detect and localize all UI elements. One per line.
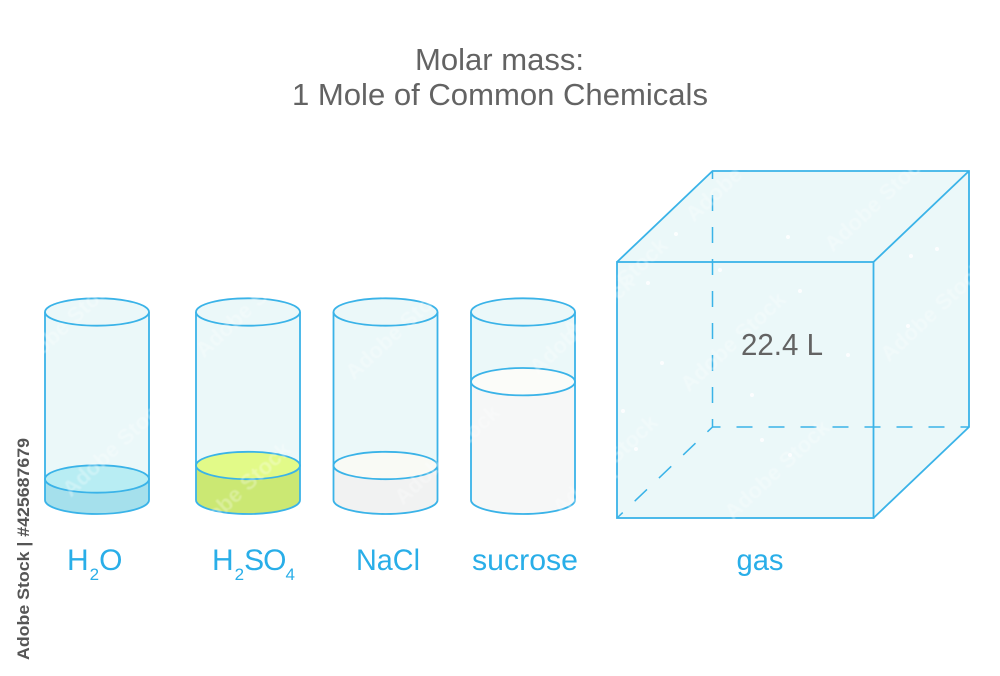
watermark pattern: Adobe Stock xyxy=(875,256,991,367)
watermark pattern: Adobe Stock xyxy=(389,399,505,510)
watermark pattern xyxy=(7,116,991,572)
label: H2SO4: SO xyxy=(244,544,286,577)
label: H2SO4: H xyxy=(212,544,234,577)
title: 1 Mole of Common Chemicals xyxy=(292,78,708,112)
title xyxy=(292,43,708,112)
watermark pattern: Adobe Stock xyxy=(57,391,173,502)
cylinder: H2O xyxy=(45,298,149,514)
watermark pattern: Adobe Stock xyxy=(675,286,791,397)
label: H2O: O xyxy=(99,544,122,577)
watermark pattern: Adobe Stock xyxy=(860,437,976,548)
watermark pattern: Adobe Stock xyxy=(507,461,623,572)
watermark pattern: Adobe Stock xyxy=(340,274,456,385)
watermark pattern: Adobe Stock xyxy=(680,116,796,227)
cube: gas volume xyxy=(617,171,969,518)
title: Molar mass: xyxy=(415,43,584,77)
cylinder: NaCl xyxy=(334,298,438,514)
cylinder: sucrose xyxy=(471,298,575,514)
cube volume label: 22.4 L xyxy=(741,328,823,362)
cylinder: H2SO4 xyxy=(196,298,300,514)
label: H2SO4: 4 xyxy=(286,565,295,584)
watermark pattern: Adobe Stock xyxy=(819,146,935,257)
label: NaCl: NaCl xyxy=(356,544,420,577)
watermark pattern: Adobe Stock xyxy=(719,414,835,525)
label: H2SO4: 2 xyxy=(235,565,244,584)
watermark pattern: Adobe Stock xyxy=(557,232,673,343)
watermark pattern: Adobe Stock xyxy=(180,436,296,547)
label: sucrose: sucrose xyxy=(472,544,578,577)
watermark pattern: Adobe Stock xyxy=(547,409,663,520)
watermark pattern: Adobe Stock xyxy=(7,269,123,380)
label: H2O: 2 xyxy=(90,565,99,584)
label: H2O: H xyxy=(67,544,89,577)
label: gas: gas xyxy=(736,544,784,577)
stock image id: Adobe Stock | #425687679 xyxy=(15,438,33,660)
watermark pattern: Adobe Stock xyxy=(190,252,306,363)
watermark pattern: Adobe Stock xyxy=(524,269,640,380)
